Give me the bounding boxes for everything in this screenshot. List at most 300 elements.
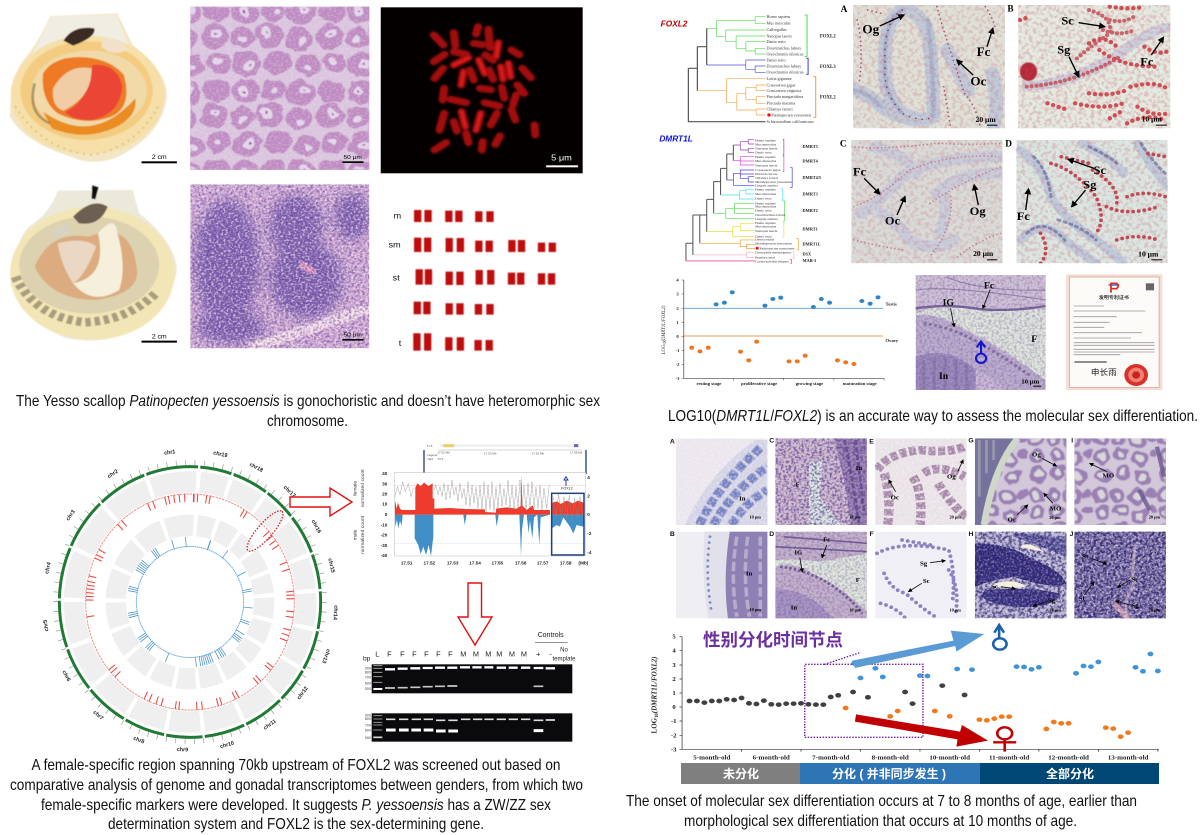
labels: D: 10 μm: [1138, 250, 1159, 259]
chromosome labels: chr11: [263, 719, 278, 732]
axis labels: 17.51: [401, 560, 413, 565]
labels: A: 20 μm: [976, 115, 997, 124]
panel letters: C: [769, 438, 774, 445]
micrograph B: testis: [1007, 3, 1170, 128]
axis labels: LOG: [649, 718, 659, 733]
chromosome labels: chr16: [310, 519, 322, 535]
karyotype: t: [399, 339, 402, 348]
lane labels: bp: [363, 656, 371, 663]
chromosome labels: chr15: [326, 558, 336, 573]
gel image 1: 800: [365, 670, 371, 674]
phylogenetic tree: FOXL2: FOXL2: [820, 95, 836, 100]
panel letters: J: [1070, 531, 1074, 538]
scatter chart: testis and ovary: Testis: [886, 301, 897, 306]
labels: A: [841, 4, 997, 126]
lane labels: template: [553, 657, 576, 663]
phylogenetic tree: DMRT1L: Mus musculus: [755, 142, 777, 146]
phylogenetic tree: FOXL2: Oreochromis niloticus: [767, 51, 804, 56]
phylogenetic tree: FOXL2: [688, 14, 836, 124]
labels: D: Sg: [1083, 178, 1096, 191]
panel letters: H: [969, 531, 974, 538]
labels: IG panel: 10 μm: [1021, 379, 1040, 385]
gel image 1: 500: [365, 687, 371, 691]
red female coverage: [395, 475, 583, 515]
chromosome labels: chr8: [132, 736, 145, 746]
undifferentiated points: [687, 683, 968, 707]
scatter chart: testis and ovary: 4: [676, 278, 680, 283]
chromosome labels: chr18: [248, 462, 264, 474]
labels: B: 10 μm: [1142, 115, 1163, 124]
phylogenetic tree: DMRT1L: Crassostrea gigas: [755, 168, 781, 172]
phylogenetic tree: DMRT1L: Drosophila melanogaster: [755, 250, 792, 254]
scatter chart: testis and ovary: -2: [676, 362, 680, 367]
panel annotations and arrows: Sc: [923, 578, 930, 585]
panel annotations and arrows: 10 μm: [1049, 608, 1061, 613]
caption: onset of molecular sex differentiation: morphological sex differentiation that occurs at 10 months of age.: [684, 813, 1077, 830]
gel electrophoresis: [363, 632, 576, 742]
phylogenetic tree: DMRT1L: DMRT1: [803, 227, 818, 232]
axis labels: 7-month-old: [812, 755, 850, 762]
gel image 1: 600: [365, 682, 371, 686]
labels: C: Oc: [885, 214, 901, 228]
gene track box: PT1: [438, 457, 444, 461]
gene track box: GE1: [427, 457, 434, 461]
scatter chart: testis and ovary: Ovary: [886, 338, 899, 343]
lane labels: No: [560, 648, 568, 654]
micrograph A: ovary: [841, 4, 1005, 128]
phylogenetic tree: DMRT1L: Homo sapiens: [755, 155, 776, 159]
chromosome labels: chr1: [164, 449, 176, 457]
karyotype: sm: [388, 240, 401, 249]
labels: B: B: [1007, 3, 1014, 13]
chromosome labels: chr5: [43, 619, 50, 632]
outer green ring: [50, 456, 330, 748]
phylogenetic tree: DMRT1L: Nanopus laevis: [755, 147, 778, 151]
axis labels: [649, 634, 1149, 762]
panel annotations and arrows: F: [856, 577, 860, 584]
phylogenetic tree: FOXL2: Mus musculus: [767, 21, 791, 26]
histology: testis section: 50 μm: [344, 332, 362, 338]
arrow: male trajectory: [852, 631, 984, 668]
axis labels: 12-month-old: [1048, 755, 1089, 762]
phylogenetic tree: FOXL2: Dicentrarchus labrax: [767, 63, 801, 68]
chromosome labels: [43, 449, 338, 754]
axis labels: 4: [672, 648, 677, 655]
chromosome labels: chr19: [213, 450, 228, 459]
caption: female-specific region: A female-specific region spanning 70kb upstream of FOXL2 was screened out based on: [32, 757, 560, 774]
chromosome labels: chr2: [107, 469, 119, 480]
coverage plot: female vs male counts: normalized count: [360, 515, 366, 554]
labels: D: Sc: [1094, 163, 1107, 177]
phylogenetic tree: FOXL2: Schizocardium californicum: [767, 119, 814, 124]
gene track box: 17.53 Mb: [484, 451, 497, 455]
caption: female-specific region: comparative analysis of genome and gonadal transcriptomes between genders, from which two: [10, 777, 583, 794]
gel image 2: 500: [365, 736, 371, 740]
phylogenetic tree: DMRT1L: [686, 138, 821, 263]
lane labels: Controls: [538, 632, 564, 639]
axis labels: -40: [381, 553, 388, 558]
axis labels: 40: [382, 471, 388, 476]
phylogenetic tree: DMRT1L: Mus musculus: [755, 192, 777, 196]
scatter chart: testis and ovary: resting stage: [696, 381, 721, 386]
gel image 2: 800: [365, 717, 371, 721]
chromosome labels: chr4: [44, 562, 53, 575]
phylogenetic tree: DMRT1L: DMRT1L: [803, 242, 821, 247]
phylogenetic tree: FOXL2: Crassostrea virginica: [767, 88, 802, 93]
icon: male symbol: [976, 342, 986, 363]
axis labels: [381, 471, 592, 565]
phylogenetic tree: DMRT1L: Nanopus laevis: [755, 229, 778, 233]
photo: male scallop: [10, 185, 177, 343]
panel annotations and arrows: Fc: [823, 537, 830, 544]
lane labels: F: [400, 650, 405, 659]
heading: sex differentiation time node: 性别分化时间节点: [703, 627, 843, 652]
micrograph D: testis: [1005, 139, 1168, 263]
panel annotations and arrows: St: [1079, 596, 1086, 603]
axis labels: -3: [671, 747, 676, 753]
chromosome labels: chr9: [177, 747, 188, 754]
phylogenetic tree: DMRT1L: Homo sapiens: [755, 221, 776, 225]
gel image 1: [365, 664, 572, 693]
labels: A: Fc: [977, 45, 991, 59]
lane labels: F: [412, 650, 417, 659]
axis labels: 4: [587, 475, 590, 480]
blue region highlight: [552, 493, 584, 555]
photo: female scallop: 2 cm: [152, 154, 167, 161]
lane labels: F: [424, 650, 429, 659]
lane labels: [363, 632, 576, 663]
labels: IG panel: IG: [943, 299, 955, 309]
scatter chart: testis and ovary: maturation stage: [843, 381, 877, 386]
lane labels: M: [485, 650, 491, 659]
micrograph A: [676, 438, 768, 525]
axis labels: -10: [381, 522, 388, 527]
micrograph G: [974, 438, 1066, 525]
panel annotations and arrows: [739, 452, 1161, 613]
axis labels: -20: [381, 533, 388, 538]
labels: B: Fc: [1140, 55, 1154, 68]
lane labels: F: [448, 650, 453, 659]
panel letters: F: [869, 531, 874, 538]
panel annotations and arrows: In: [791, 605, 798, 611]
micrograph B: [676, 532, 768, 618]
phylogenetic tree: DMRT1L: Chlamys farreri: [755, 176, 778, 180]
axis labels: 17.52: [423, 560, 436, 565]
micrograph I: [1074, 438, 1166, 525]
axis labels: -2: [671, 733, 676, 739]
micrograph E: [875, 438, 967, 525]
phylogenetic tree: DMRT1L: Pinctada fucata: [755, 172, 778, 176]
stage bar: 全部分化: [1046, 766, 1094, 781]
phylogenetic tree: DMRT1L: DSX: [803, 252, 812, 257]
scatter chart: testis and ovary: 1: [676, 320, 680, 325]
lane labels: L: [375, 650, 379, 659]
axis labels: 2: [587, 493, 590, 498]
labels: C: Og: [970, 204, 986, 218]
grey fluctuating signal: [395, 480, 583, 522]
scatter chart: testis and ovary: proliferative stage: [741, 381, 777, 386]
labels: IG panel: In: [939, 372, 949, 382]
caption: scallop is gonochoristic: chromosome.: [267, 413, 348, 430]
panel annotations and arrows: 10 μm: [849, 514, 861, 519]
panel: ten gonad development micrographs: [670, 438, 1166, 618]
chromosome labels: chr3: [65, 509, 77, 522]
stage bar: 未分化: [723, 766, 759, 781]
chromosome labels: chr6: [61, 670, 71, 683]
axis labels: 6-month-old: [753, 755, 790, 762]
up arrow and gene label: FOXL2: [561, 486, 573, 490]
gel image 2: 700: [365, 723, 371, 727]
icon: male symbol: [993, 625, 1007, 650]
axis labels: 17.56: [515, 560, 527, 565]
phylogenetic tree: DMRT1L: DMRT2: [803, 208, 818, 213]
panel letters: [670, 438, 1074, 538]
axes: [679, 637, 1159, 752]
phylogenetic tree: DMRT1L: Ostrea edulis: [755, 238, 775, 242]
male points: [851, 652, 1161, 680]
panel annotations and arrows: Oc: [1008, 517, 1016, 523]
axis labels: 10: [382, 502, 388, 507]
gel image 1: 700: [365, 676, 371, 680]
phylogenetic tree: DMRT1L: Mus musculus: [755, 159, 777, 163]
caption: onset of molecular sex differentiation: [626, 793, 1137, 830]
axis labels: 17.54: [469, 560, 481, 565]
axis labels: 5: [672, 634, 676, 641]
caption: female-specific region: female-specific markers were developed. It suggests P. yessoensis has a ZW/ZZ sex: [41, 797, 551, 814]
panel letters: G: [968, 438, 974, 445]
axis labels: -1: [671, 718, 676, 725]
histology: testis section: [190, 184, 369, 348]
phylogenetic tree: DMRT1L: Danio rerio: [755, 196, 772, 200]
stage bar: 分化 ( 并非同步发生 ): [832, 766, 946, 781]
phylogenetic tree: FOXL2: Crassostrea gigas: [767, 82, 796, 87]
lane labels: F: [436, 650, 441, 659]
labels: B: [1007, 3, 1167, 126]
axis labels: 17.57: [537, 560, 549, 565]
certificate: patent: 申长雨: [1091, 367, 1117, 377]
karyotype: [388, 210, 552, 351]
phylogenetic tree: FOXL2: Danio rerio: [767, 57, 786, 62]
labels: IG panel: F: [1031, 335, 1038, 345]
labels: C: C: [840, 139, 847, 149]
stage bar: [681, 763, 1159, 784]
panel: LOG10 scatter, section and certificate: [662, 274, 1162, 390]
certificate: patent: [1066, 274, 1162, 390]
phylogenetic tree: DMRT1L: Mizuhopecten yessoensis: [755, 180, 793, 184]
phylogenetic tree: FOXL2: Oreochromis niloticus: [767, 70, 804, 75]
labels: IG panel: Fc: [984, 282, 994, 291]
panel letters: A: [670, 439, 675, 445]
labels: D: D: [1005, 139, 1012, 149]
scatter chart: testis and ovary: -1: [676, 348, 680, 353]
panel annotations and arrows: IG: [794, 550, 802, 557]
coverage plot: female vs male counts: [353, 444, 592, 565]
phylogenetic tree: DMRT1L: Danio rerio: [755, 151, 772, 155]
karyotype: st: [393, 273, 400, 282]
phylogenetic tree: DMRT1L: Mus musculus: [755, 204, 777, 208]
micrograph: metaphase chromosomes: 5 μm: [551, 153, 572, 163]
phylogenetic tree: FOXL2: Lottia gigantea: [767, 76, 792, 81]
gel image 2: 900: [365, 714, 371, 718]
micrograph D: [775, 532, 867, 618]
panel letters: D: [769, 531, 774, 538]
arrow: female trajectory: [855, 714, 988, 747]
phylogenetic tree: DMRT1L: DMRT4: [803, 158, 819, 163]
gel image 2: [365, 713, 572, 742]
panel letters: I: [1071, 438, 1073, 445]
axis labels: 1: [672, 690, 676, 697]
scatter chart: testis and ovary: (DMRT1L/FOXL2): [662, 305, 667, 341]
panel: phylogenies and gonad micrographs: [659, 3, 1170, 263]
chromosome labels: chr12: [296, 686, 310, 701]
caption: female-specific region: determination system and FOXL2 is the sex-determining gene.: [108, 816, 484, 833]
labels: B: Sc: [1061, 14, 1074, 27]
panel annotations and arrows: Sc: [991, 584, 998, 591]
phylogenetic tree: DMRT1L: Homo sapiens: [755, 201, 776, 205]
phylogenetic tree: DMRT1L: Dicentrarchus labrax: [755, 213, 786, 217]
gene track box: 17.5: [427, 444, 433, 448]
phylogenetic tree: DMRT1L: Caenorhabditis elegans: [755, 259, 789, 263]
chromosome labels: chr13: [320, 648, 331, 664]
histology: ovary section: [190, 7, 369, 170]
labels: B: Sg: [1057, 43, 1070, 56]
labels: D: Fc: [1017, 209, 1030, 223]
axis labels: -4: [587, 550, 592, 555]
panel annotations and arrows: 20 μm: [1049, 515, 1061, 520]
panel annotations and arrows: 20 μm: [949, 514, 961, 519]
panel: female and male scallop, histology and karyotype: [10, 7, 583, 351]
panel letters: E: [869, 439, 874, 445]
female points: [843, 706, 1131, 739]
icon: female symbol: [993, 727, 1016, 752]
chromosome labels: chr17: [282, 485, 296, 499]
lane labels: F: [387, 650, 392, 659]
axis labels: 3: [672, 662, 676, 669]
phylogenetic tree: FOXL2: FOXL2: [820, 35, 836, 40]
axis labels: 17.58: [560, 560, 572, 565]
phylogenetic tree: DMRT1L: Homo sapiens: [755, 138, 776, 142]
chromosome labels: chr14: [331, 605, 338, 620]
panel annotations and arrows: Sg: [1131, 603, 1139, 609]
photo: female scallop: [10, 13, 177, 163]
panel annotations and arrows: Sg: [1048, 598, 1056, 605]
phylogenetic tree: FOXL2: Dicentrarchus labrax: [767, 46, 801, 51]
photo: male scallop: 2 cm: [152, 334, 167, 340]
micrograph C: ovary: [840, 139, 1003, 263]
phylogenetic tree: DMRT1L: Patinopecten yessoensis: [760, 247, 795, 251]
phylogenetic tree: FOXL2: Nanopus laevis: [767, 33, 792, 38]
gene track box: [424, 444, 586, 473]
scatter chart: testis and ovary: 0: [676, 334, 680, 339]
lane labels: -: [549, 650, 552, 659]
gene label: DMRT1L: DMRT1L: [659, 135, 693, 144]
blue track: [136, 546, 244, 658]
phylogenetic tree: FOXL2: Chlamys farreri: [767, 106, 794, 111]
certificate: patent: 发明专利证书: [1099, 294, 1129, 301]
phylogenetic tree: DMRT1L: Homo sapiens: [755, 188, 776, 192]
axis labels: (Mb): [578, 560, 589, 565]
gene track box: 17.55 Mb: [532, 451, 544, 455]
scatter chart: testis and ovary: 3: [676, 292, 680, 297]
gene track box: 17.51 Mb: [437, 451, 450, 455]
panel annotations and arrows: Oc: [891, 495, 899, 501]
coverage plot: female vs male counts: female: [353, 481, 359, 496]
labels: C: 20 μm: [973, 249, 994, 258]
labels: D: [1005, 139, 1162, 260]
axis labels: 17.53: [447, 560, 459, 565]
blue male coverage: [395, 515, 584, 556]
gene label: FOXL2: FOXL2: [661, 20, 688, 29]
arrow: coverage plot to gels: [458, 583, 492, 645]
axis labels: 0: [587, 512, 590, 517]
up arrow and gene label: [561, 477, 573, 490]
lane labels: M: [496, 650, 502, 659]
phylogenetic tree: DMRT1L: Mus musculus: [755, 225, 777, 229]
coverage plot: female vs male counts: normalized count: [360, 469, 366, 507]
phylogenetic tree: DMRT1L: Lingula anatina: [755, 217, 778, 221]
scatter chart: testis and ovary: [662, 278, 899, 386]
phylogenetic tree: FOXL2: Pinctada margaritifera: [767, 94, 804, 99]
phylogenetic tree: FOXL2: Callorgallus: [767, 27, 787, 32]
phylogenetic tree: DMRT1L: Nanopus laevis: [755, 163, 778, 167]
panel annotations and arrows: Og: [947, 474, 956, 481]
axis labels: 30: [382, 481, 388, 486]
micrograph F: [875, 532, 966, 618]
gene track box: 17.58 Mb: [570, 451, 583, 455]
micrograph: metaphase chromosomes: [381, 7, 583, 173]
labels: IG panel: [939, 282, 1041, 387]
panel annotations and arrows: St: [1082, 554, 1089, 561]
axis labels: 2: [672, 676, 676, 683]
chromosome labels: chr7: [92, 710, 104, 722]
panel annotations and arrows: In: [746, 571, 753, 578]
panel annotations and arrows: 10 μm: [949, 608, 961, 613]
gel image 2: 600: [365, 729, 371, 733]
panel annotations and arrows: 10 μm: [1149, 608, 1161, 613]
phylogenetic tree: FOXL2: FOXL3: [820, 65, 836, 70]
phylogenetic tree: DMRT1L: DMRT3: [803, 192, 818, 197]
phylogenetic tree: DMRT1L: Bombyx mori: [755, 255, 775, 259]
highlight: dotted red ellipse: [242, 506, 288, 556]
scatter chart: testis and ovary: 2: [676, 306, 680, 311]
phylogenetic tree: FOXL2: Homo sapiens: [767, 14, 791, 19]
labels: A: A: [841, 4, 848, 14]
micrograph H: [974, 532, 1066, 618]
axis labels: -2: [587, 531, 592, 536]
axis labels: 5-month-old: [693, 755, 731, 762]
axis labels: 13-month-old: [1108, 755, 1149, 762]
axis labels: 0: [672, 704, 676, 711]
circos plot: genome and transcriptome comparison: [43, 449, 338, 754]
axis labels: 0: [385, 512, 388, 517]
panel annotations and arrows: 20 μm: [1149, 514, 1161, 519]
phylogenetic tree: FOXL2: Danio rerio: [767, 39, 786, 44]
phylogenetic tree: DMRT1L: DMRT4/5: [803, 175, 821, 180]
labels: A: Oc: [970, 75, 987, 89]
micrograph: indifferent gonad: [916, 275, 1046, 390]
gel image 1: 900: [365, 666, 371, 670]
karyotype: m: [393, 211, 401, 220]
scatter chart: testis and ovary: 10: [663, 341, 667, 345]
lane labels: M: [473, 650, 479, 659]
phylogenetic tree: DMRT1L: DMRT5: [803, 144, 818, 149]
micrograph C: [775, 438, 867, 525]
caption: scallop is gonochoristic: The Yesso scallop Patinopecten yessoensis is gonochoristic and doesn’t have heteromorphic sex: [16, 393, 600, 410]
arrow: circos to coverage plot: [290, 488, 352, 516]
lane labels: +: [536, 650, 540, 659]
red track: [86, 494, 294, 710]
panel annotations and arrows: 10 μm: [749, 607, 761, 612]
